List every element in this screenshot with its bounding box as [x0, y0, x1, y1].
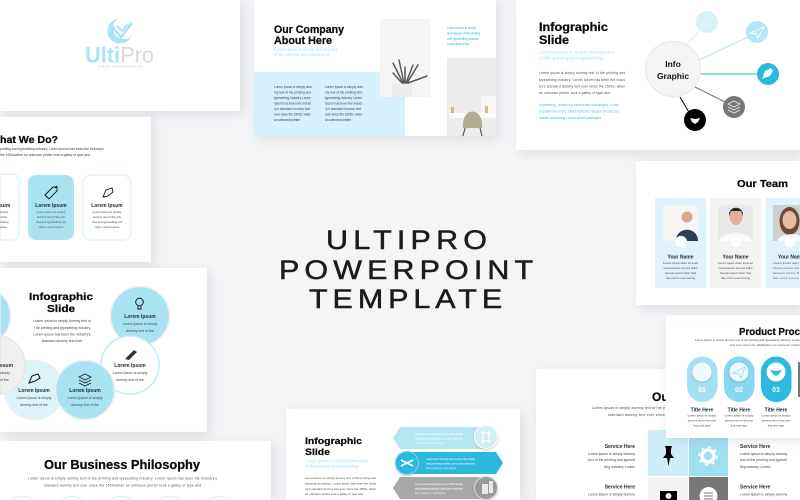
member card 1: consectetuer elit sed tellus — [663, 266, 698, 270]
circle: grey: esum — [0, 363, 14, 369]
panel: logo slide — [0, 0, 240, 111]
card: left: sum — [0, 203, 11, 209]
arrow: blue: the industry standard — [426, 466, 457, 470]
panel: what we do slide — [0, 117, 151, 262]
heading: Infographic — [305, 436, 362, 447]
icon: layers — [79, 374, 91, 386]
panel: arrows infographic slide — [286, 409, 520, 500]
arrow: grey: the industry standard — [415, 491, 446, 495]
blue note: dummy text of the printing — [447, 32, 480, 36]
description: Lorem Ipsum is simply dummy text of the p — [592, 406, 665, 410]
body text: try's standard dummy text ever since the 1500s, when — [539, 84, 625, 88]
card: highlighted: ustry. Lorem Ipsum — [39, 225, 64, 229]
service: top right: Service Here — [740, 444, 771, 450]
card: right: ustry. Lorem Ipsum — [95, 225, 120, 229]
text column 1: ry's standard dummy text — [274, 107, 310, 111]
circle: top right — [110, 286, 170, 346]
description — [695, 338, 800, 347]
text column 1 — [274, 85, 312, 122]
circle: white: dummy text of the — [116, 378, 144, 382]
card: right: Lorem Ipsum is simply — [93, 210, 122, 214]
heading: Our Team — [737, 179, 788, 190]
step 1: Title Here — [691, 408, 714, 414]
circle: light blue: dummy text of the — [20, 403, 48, 407]
heading: hat We Do? — [0, 134, 58, 146]
description: The printing and typesetting industry — [34, 326, 90, 330]
icon: UltiPro logo mark — [108, 17, 135, 44]
step 2: dummy text of the prin — [725, 418, 754, 422]
text column 2: typesetting industry Lorem — [325, 96, 362, 100]
step 1: ting and type — [694, 424, 711, 428]
member card 1: Aenean ipsum Nam Sed — [665, 271, 697, 275]
arrow: grey: Lorem Ipsum is simply dummy text of the printing — [415, 482, 464, 486]
service: top right: ting industry. Lorem — [740, 465, 771, 469]
heading: Infographic — [29, 292, 94, 303]
icon: pencil — [125, 350, 137, 360]
arrow: blue: and typesetting industry. Lorem Ipsum has been — [426, 462, 476, 466]
main title: POWERPOINT — [279, 256, 533, 285]
arrow: grey — [393, 476, 498, 500]
service: top left — [588, 444, 635, 469]
heading: Slide — [47, 304, 76, 315]
member card 2: Your Name — [722, 254, 749, 260]
circle: white — [101, 336, 159, 394]
step 1: Lorem Ipsum is simply — [688, 414, 717, 418]
logo wordmark: UltiPro — [85, 42, 154, 68]
photo: bald man — [663, 205, 698, 241]
heading: Ou — [652, 390, 669, 404]
step 3: ting and type — [768, 424, 785, 428]
main title: ULTIPRO — [326, 226, 487, 255]
member card 3: Aenean ipsum N — [773, 271, 799, 275]
subtitle: of the printing and typesetting — [305, 464, 358, 468]
text column 2 — [325, 85, 363, 122]
circle: blue: Lorem Ipsum — [69, 388, 101, 394]
step 1 — [687, 356, 718, 428]
body text: Lorem Ipsum is simply dummy text of the printing and — [539, 71, 625, 75]
text column 1: ever since the 1500s, when — [274, 112, 311, 116]
subtitle: Lorem Ipsum is simply dummy text — [274, 47, 338, 52]
member card 2: consectetuer elit sed tellus — [718, 266, 753, 270]
blue note: Lorem Ipsum is simply — [447, 26, 476, 30]
icon node: 1 — [696, 11, 718, 33]
panel: services slide — [536, 369, 800, 500]
service: bottom left: Lorem Ipsum is simply dummy — [588, 492, 635, 496]
text column 1: Lorem Ipsum is simply dum — [274, 85, 312, 89]
card: right: dummy text of the prin — [93, 215, 122, 219]
service: top left: Lorem Ipsum is simply dummy — [588, 452, 635, 456]
text column 1: Ipsum has been the indust — [274, 102, 311, 106]
heading — [274, 24, 345, 47]
hub circle: Info — [665, 59, 681, 69]
heading — [29, 292, 94, 315]
text column 2: ry's standard dummy text — [325, 107, 361, 111]
step 2: 02 — [735, 387, 743, 394]
step 3: Lorem Ipsum is simply — [762, 414, 791, 418]
arrow: light blue: and typesetting industry. Lorem Ipsum has been — [415, 436, 464, 440]
blue note: Lorem Ipsum has — [447, 42, 469, 46]
card: left: psum — [0, 225, 8, 229]
circle: light blue: Lorem Ipsum — [18, 388, 50, 394]
body text: try's standard dummy text ever since the 1500s, when — [305, 487, 376, 491]
card: left: simply — [0, 210, 9, 214]
heading — [305, 436, 362, 458]
description: standard dummy text ever since — [608, 413, 665, 417]
step 3 — [761, 356, 792, 428]
subtitle — [274, 47, 338, 57]
step 4 — [798, 362, 800, 397]
description: Lorem Ipsum is simply dummy text of the printing and typesetting industry. Lorem — [695, 338, 800, 342]
heading: About Here — [274, 35, 332, 47]
heading: Infographic — [539, 22, 609, 34]
card: highlighted: ting and typesetting ind — [36, 220, 66, 224]
service: bottom right: Service Here — [740, 484, 771, 490]
member card 3: Lorem ipsum dolor — [773, 261, 799, 265]
card: highlighted: Lorem Ipsum — [35, 203, 67, 209]
blue text: sheets containing Lorem Ipsum passages — [539, 116, 601, 120]
service: top left: text of the printing and typeset — [588, 458, 635, 462]
photo: woman — [773, 205, 800, 241]
photo: plant — [380, 19, 430, 97]
intro text: the 1500swhen an unknown printer took a galley of type and — [0, 153, 90, 157]
icon node: handshake — [684, 109, 706, 131]
blue note: and typesetting industry — [447, 37, 479, 41]
text column 1: typesetting industry Lorem — [274, 96, 311, 100]
member card 1: has enim Lorem lacing — [666, 276, 695, 280]
card: right — [83, 175, 131, 240]
body text: typesetting industry. Lorem Ipsum has been the indus — [305, 482, 377, 486]
icon: menu button — [700, 487, 718, 500]
connector lines — [680, 30, 758, 114]
arrow: blue: Lorem Ipsum is simply dummy text of the printing — [426, 457, 476, 461]
icon: pen — [103, 188, 113, 197]
text column 1: an unknown printer — [274, 118, 301, 122]
tile grid — [648, 430, 728, 500]
circle: blue — [56, 360, 114, 420]
text column 2: ever since the 1500s, when — [325, 112, 362, 116]
member card 2 — [710, 198, 761, 288]
body text — [305, 476, 377, 496]
photo: chair — [447, 58, 496, 136]
step 2: Title Here — [728, 408, 751, 414]
subtitle: of the printing and typesetting — [274, 52, 329, 57]
circle: top right: Lorem Ipsum — [124, 314, 156, 320]
member card 1: Lorem ipsum dolor sit amet — [663, 261, 698, 265]
circle: white: Lorem Ipsum is simply — [113, 371, 148, 375]
heading: Our Business Philosophy — [44, 458, 200, 472]
circle: light blue: Lorem Ipsum is simply — [17, 396, 52, 400]
subtitle: of the printing and typesetting — [539, 56, 603, 60]
intro text: printing and typesetting industry. Lorem Ipsum has been the industry's — [0, 147, 104, 151]
blue band — [254, 72, 405, 136]
logo tagline: clean presentation — [98, 64, 142, 68]
service: bottom right: Lorem Ipsum is simply dummy — [740, 492, 788, 496]
description — [592, 406, 665, 417]
icon: light bulb — [136, 298, 143, 309]
service: bottom right — [740, 484, 788, 496]
heading: Slide — [539, 35, 569, 47]
panel: team slide — [636, 161, 800, 305]
card: highlighted: dummy text of the prin — [37, 215, 66, 219]
text column 2: an unknown printer — [325, 118, 352, 122]
panel: company about slide — [254, 0, 496, 136]
member card 2: Aenean ipsum Nam Sed — [720, 271, 752, 275]
card: left: of the — [0, 215, 8, 219]
member card 1 — [655, 198, 706, 288]
circle: top left — [0, 293, 11, 339]
description: Lorem Ipsum has been the industry's — [33, 332, 91, 336]
service: bottom left — [588, 484, 635, 496]
card: highlighted: Lorem Ipsum is simply — [37, 210, 66, 214]
body text: an unknown printer took a galley of type and — [305, 492, 363, 496]
description: text ever since the 1500swhen an unknown printer — [730, 343, 800, 347]
circle: blue: dummy text of the — [71, 403, 99, 407]
text column 2: my text of the printing and — [325, 90, 362, 94]
description — [28, 476, 217, 488]
circle: grey: of the — [0, 378, 9, 382]
service: top right: text of the printing and typeset — [740, 458, 787, 462]
step 3: 03 — [772, 387, 780, 394]
member card 3 — [766, 198, 800, 288]
icon: camera — [660, 491, 677, 500]
step 2: ting and type — [731, 424, 748, 428]
icon node: paper plane — [746, 21, 768, 43]
body text: typesetting industry. Lorem Ipsum has been the indus — [539, 78, 625, 82]
subtitle — [539, 50, 615, 60]
text column 2: Ipsum has been the indust — [325, 102, 362, 106]
circle: blue: Lorem Ipsum is simply — [68, 396, 103, 400]
member card 3: consectetuer elit — [773, 266, 799, 270]
subtitle — [305, 458, 368, 468]
heading — [539, 22, 609, 47]
arrow: light blue: the industry standard — [415, 441, 446, 445]
step 3: Title Here — [765, 408, 788, 414]
body text — [539, 71, 625, 95]
step 3: dummy text of the prin — [762, 418, 791, 422]
hub circle — [646, 42, 700, 96]
icon: gear — [699, 447, 717, 465]
icon: pen — [29, 374, 40, 383]
card: right: ting and typesetting ind — [92, 220, 122, 224]
subtitle: Lorem Ipsum is simply dummy text — [539, 50, 615, 54]
circle: grey: simply — [0, 371, 10, 375]
member card 2: Lorem ipsum dolor sit amet — [718, 261, 753, 265]
description: Lorem Ipsum is simply dummy text of — [33, 319, 91, 323]
arrow: light blue: Lorem Ipsum is simply dummy text of the printing — [415, 432, 464, 436]
circle: grey — [0, 336, 25, 394]
step 2 — [724, 356, 754, 428]
member card 3: has enim Lorem — [773, 276, 800, 280]
main title: TEMPLATE — [309, 285, 502, 314]
icon node: layers — [723, 96, 745, 118]
card: left: setting — [0, 220, 9, 224]
text column 2: Lorem Ipsum is simply dum — [325, 85, 363, 89]
step 1: dummy text of the prin — [688, 418, 717, 422]
description: standard dummy text ever — [42, 339, 83, 343]
step 2: Lorem Ipsum is simply — [725, 414, 754, 418]
service: top right: Lorem Ipsum is simply dummy — [740, 452, 788, 456]
member card 2: has enim Lorem lacing — [721, 276, 750, 280]
main title — [279, 226, 533, 314]
card: left — [0, 174, 19, 240]
photo: man in white shirt — [718, 205, 753, 241]
service: top left: ting industry. Lorem — [605, 465, 635, 469]
blue text: popularised in the 1960s with the release of Letraset — [539, 110, 619, 114]
text column 1: my text of the printing and — [274, 90, 311, 94]
service: top right — [740, 444, 788, 469]
icon node: pen — [757, 63, 779, 85]
heading: Our Company — [274, 24, 345, 36]
icon: price tag — [45, 186, 57, 199]
panel: infographic hub slide — [516, 0, 800, 150]
card: highlighted — [28, 175, 74, 240]
blue text — [539, 103, 619, 120]
panel: product process slide — [666, 315, 800, 438]
intro text — [0, 147, 104, 157]
body text: Lorem Ipsum is simply dummy text of the printing and — [305, 476, 376, 480]
panel: business philosophy slide — [0, 441, 271, 500]
description: standard dummy text ever since the 1500swhen an unknown printer took a galley of type and — [44, 484, 201, 488]
circle: top right: dummy text of the — [126, 329, 154, 333]
circle: white: Lorem Ipsum — [114, 363, 146, 369]
circle row — [12, 497, 230, 500]
hub circle: Graphic — [657, 71, 689, 81]
description — [33, 319, 91, 343]
icon: push pin — [663, 446, 674, 466]
service: bottom left: Service Here — [605, 484, 635, 490]
description: Lorem Ipsum is simply dummy text of the printing and typesetting industry. Lorem Ipsum has been the industry's — [28, 476, 217, 480]
step 1: 01 — [698, 387, 706, 394]
heading: Slide — [305, 447, 330, 458]
arrow: light blue — [393, 426, 498, 449]
circle: top right: Lorem Ipsum is simply — [123, 322, 158, 326]
card: right: Lorem Ipsum — [91, 203, 123, 209]
circle: light blue — [4, 360, 64, 420]
arrow: grey: and typesetting industry. Lorem Ipsum has been — [415, 486, 464, 490]
arrow: blue — [396, 452, 503, 474]
service: top left: Service Here — [605, 444, 635, 450]
blue note — [447, 26, 480, 46]
blue text: typesetting, remaining essentially unchanged. It was — [539, 103, 619, 107]
panel: circles infographic slide — [0, 268, 207, 432]
member card 1: Your Name — [667, 254, 694, 260]
body text: an unknown printer took a galley of type and — [539, 91, 610, 95]
subtitle: Lorem Ipsum is simply dummy text — [305, 458, 368, 464]
